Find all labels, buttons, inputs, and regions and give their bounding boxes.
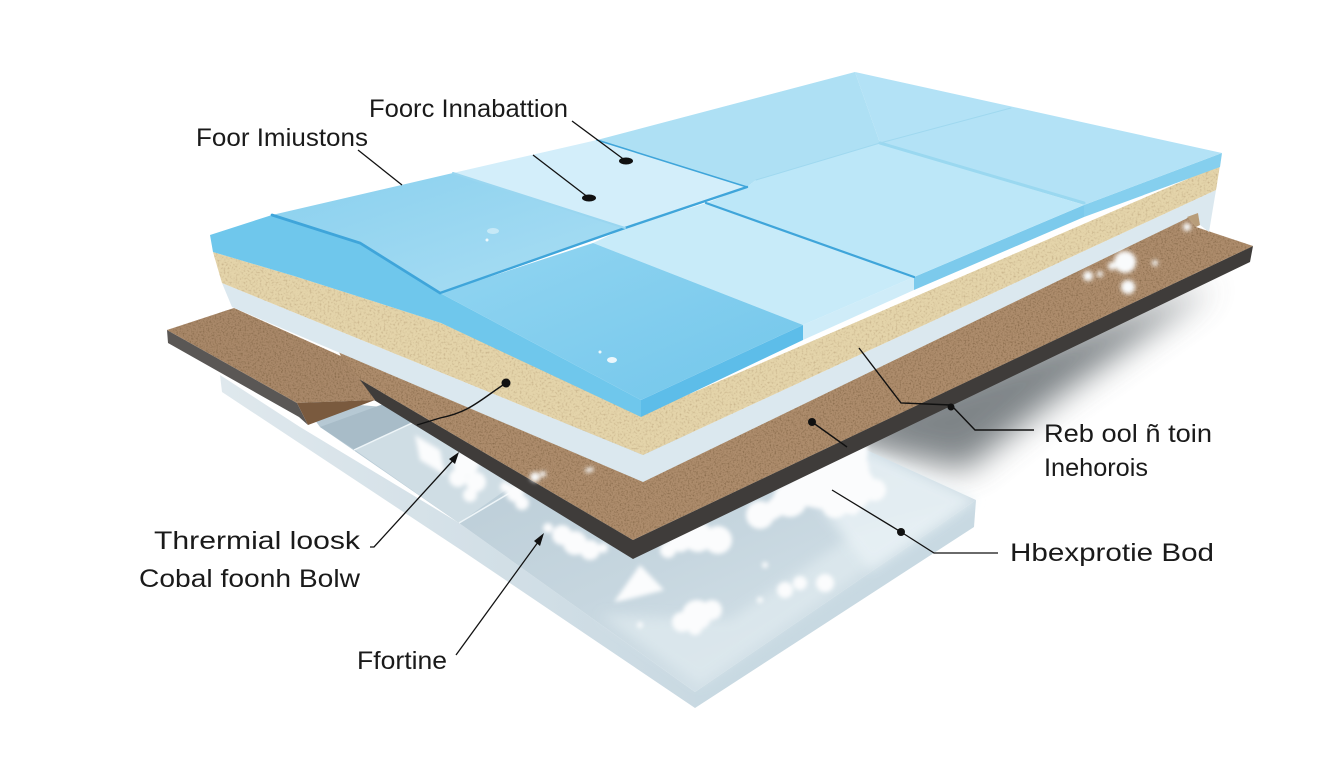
label: Hbexprotie Bod (808, 418, 1214, 567)
tile seams (272, 108, 1084, 293)
panel: brown fibre board layer (167, 215, 1253, 559)
label: pointer to light tile (533, 155, 596, 202)
label: Hbexprotie Bod: Hbexprotie Bod (1010, 539, 1214, 567)
broken corner dark edge (167, 330, 308, 425)
back right tile (855, 72, 1222, 205)
panel: ice base layer (220, 375, 976, 708)
label: Reb ool ñ toin: Reb ool ñ toin (1044, 420, 1212, 448)
back left tile (597, 72, 880, 187)
side edge light (803, 277, 914, 340)
panel: white board layer (222, 190, 1216, 482)
ice slab left side (220, 375, 695, 708)
panel: beige foam layer (213, 165, 1220, 455)
label: Thrermial loosk: Thrermial loosk (154, 527, 361, 555)
centre back tile (706, 143, 1084, 277)
label: pointer to foam layer (417, 378, 510, 425)
panel: cast shadow under the layers (720, 285, 1215, 520)
top-left tile (272, 173, 625, 293)
panel: snow clumps on ice (415, 435, 886, 635)
broken corner torn face (297, 400, 375, 425)
label: Thrermial loosk: Cobal foonh Bolw (139, 565, 361, 593)
broken corner top (167, 308, 375, 403)
label: Foor Imiustons (196, 124, 402, 185)
side edge blue (641, 325, 803, 417)
label: Ffortine: Ffortine (357, 647, 447, 675)
label: Foor Imiustons: Foor Imiustons (196, 124, 368, 152)
main board dark edge (349, 246, 1253, 559)
ice slab top (300, 400, 976, 692)
label: Foorc Innabattion: Foorc Innabattion (369, 95, 568, 123)
label: Thrermial loosk (139, 452, 459, 593)
lower blue tile (440, 243, 803, 400)
panel: blue insulation top layer (210, 72, 1222, 417)
label: Reb ool ñ toin (859, 348, 1212, 482)
left strip and its side edge (210, 215, 641, 417)
label: Foorc Innabattion (369, 95, 633, 164)
light lower tile (593, 203, 914, 325)
label: Reb ool ñ toin: Inehorois (1044, 454, 1148, 482)
white flecks (486, 228, 617, 363)
ice slab right side (695, 500, 976, 708)
light centre tile (453, 140, 747, 228)
side edge right blue (914, 205, 1084, 290)
label: Ffortine (357, 533, 544, 675)
panel: debris on board (530, 223, 1191, 482)
main board top (338, 215, 1253, 540)
